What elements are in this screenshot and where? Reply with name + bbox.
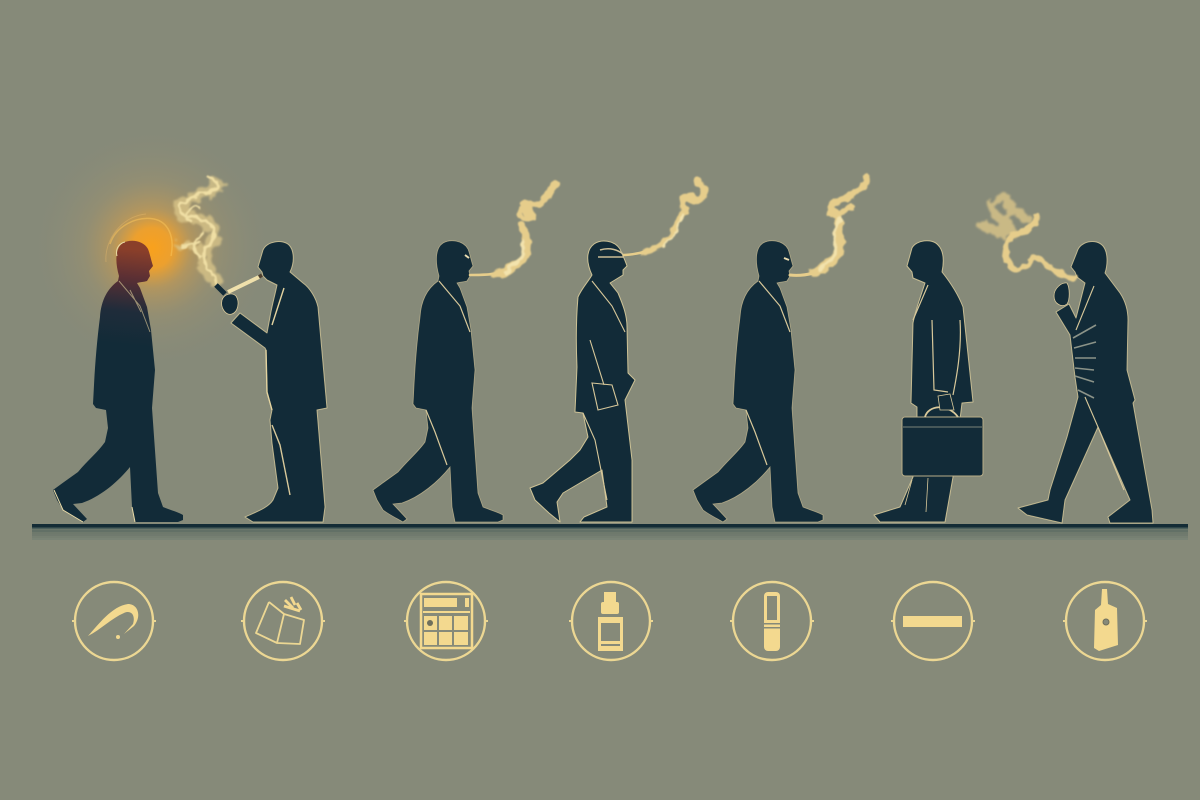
figure 1: man with glowing head — [53, 241, 183, 522]
figure 3 smoke — [470, 185, 555, 275]
icon: cigarette pack — [241, 582, 325, 660]
figure 2: man lighting a cigarette — [222, 242, 327, 522]
orange head glow — [27, 123, 277, 373]
icon: tobacco tin grid — [404, 582, 488, 660]
icon: pod vape device — [1063, 582, 1147, 660]
cigarette in figure 2's hand — [216, 275, 262, 294]
hand — [222, 294, 238, 314]
icon: curved pipe — [72, 582, 156, 660]
icon: vape cartridge — [730, 582, 814, 660]
vaping hand — [1054, 283, 1069, 306]
icon: cigarette — [891, 582, 975, 660]
ground line — [32, 524, 1188, 540]
figure 7 smoke — [982, 198, 1073, 278]
figure 4 smoke — [624, 180, 704, 255]
figure 4: man holding a folder — [530, 241, 635, 522]
figure 5: walking man — [693, 241, 823, 522]
briefcase — [902, 394, 983, 476]
figure 6: man carrying a briefcase — [874, 241, 973, 522]
figure 3: walking man — [373, 241, 503, 522]
figure 7: man vaping and walking — [1018, 241, 1153, 523]
figure 5 smoke — [790, 178, 866, 275]
icon: e-liquid bottle — [569, 582, 653, 660]
figure 1 smoke — [178, 175, 218, 282]
